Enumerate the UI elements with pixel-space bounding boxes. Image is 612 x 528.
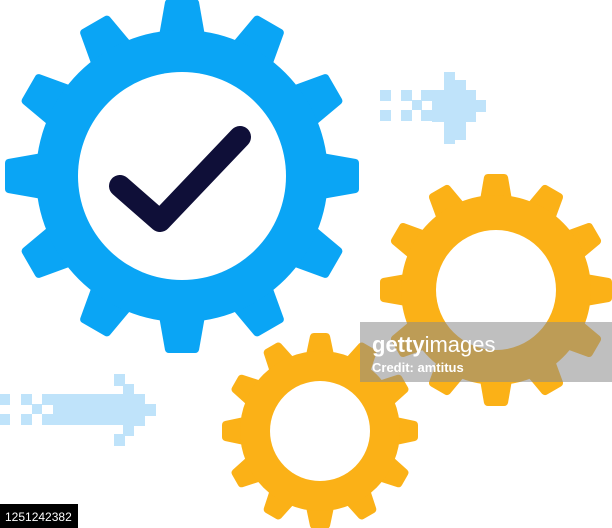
arrow: bottom-left pixel arrow [0,374,156,446]
image id label [0,504,78,528]
icon: blue gear [5,0,359,353]
watermark box: gettyimages [372,332,495,357]
icon: large orange gear [380,174,612,406]
watermark box [360,322,612,382]
icon: checkmark [120,137,240,221]
watermark box: Credit: amtitus [372,360,464,375]
icon: small orange gear [222,333,418,528]
arrow: top pixel arrow [380,72,486,144]
image id label: 1251242382 [5,510,72,524]
